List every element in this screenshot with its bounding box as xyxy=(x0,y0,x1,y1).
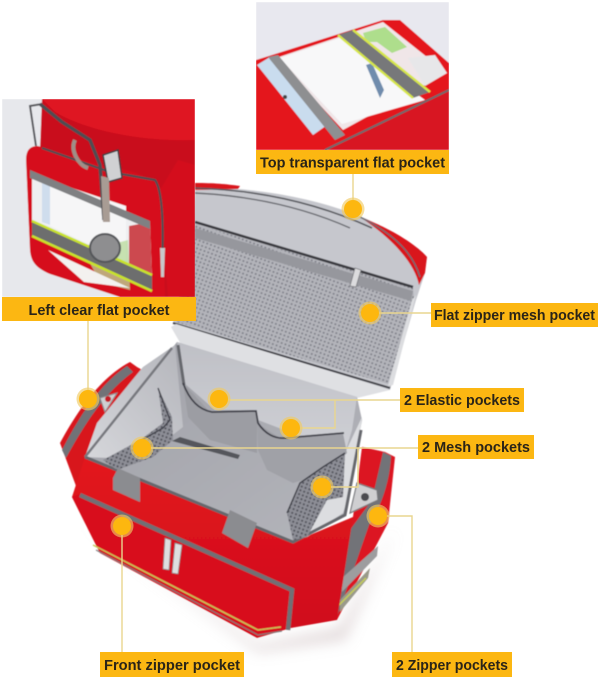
grey strip xyxy=(268,55,345,140)
front zipper pocket xyxy=(72,494,292,637)
carry handle straps xyxy=(113,468,257,548)
connector lines xyxy=(88,174,431,652)
label: 2 elastic pockets: 2 Elastic pockets xyxy=(404,392,520,409)
flat zipper mesh pocket xyxy=(176,222,414,384)
label: 2 zipper pockets xyxy=(392,652,512,677)
label: front zipper pocket xyxy=(100,652,244,677)
label: 2 zipper pockets: 2 Zipper pockets xyxy=(396,657,508,674)
bag lid xyxy=(171,183,427,398)
label: 2 elastic pockets xyxy=(400,388,524,412)
floor shadow xyxy=(80,520,395,652)
pocket body xyxy=(26,146,165,297)
label: top transparent flat pocket: Top transparent flat pocket xyxy=(260,154,445,172)
clear pocket window xyxy=(30,170,152,291)
clear pocket with leaflet xyxy=(276,22,447,130)
pocket zipper pull xyxy=(160,248,165,277)
label: left clear flat pocket: Left clear flat pocket xyxy=(28,302,170,319)
red bag top xyxy=(256,20,449,150)
upper bag body xyxy=(40,99,195,297)
label: flat zipper mesh pocket xyxy=(431,303,598,327)
label: top transparent flat pocket xyxy=(256,150,449,174)
product photo: open red medical bag xyxy=(60,183,427,652)
metal shoulder ring xyxy=(350,483,378,513)
bag front body xyxy=(72,457,353,638)
label: left clear flat pocket xyxy=(2,297,196,321)
label: flat zipper mesh pocket: Flat zipper mesh pocket xyxy=(434,307,595,324)
label: front zipper pocket: Front zipper pocket xyxy=(104,657,240,674)
bag interior xyxy=(85,342,362,542)
label: 2 mesh pockets xyxy=(418,435,534,459)
bag right end with zipper pockets xyxy=(298,447,395,620)
blue insert card xyxy=(257,57,330,135)
bag left end xyxy=(60,362,146,494)
2 mesh pockets xyxy=(103,388,345,540)
label: 2 mesh pockets: 2 Mesh pockets xyxy=(422,439,530,456)
stethoscope xyxy=(30,104,122,262)
photo panel: top transparent flat pocket xyxy=(256,2,449,150)
marker dots xyxy=(76,198,390,538)
photo panel: left clear flat pocket xyxy=(2,99,195,297)
reflective band xyxy=(338,30,430,98)
2 elastic pockets xyxy=(183,383,347,483)
